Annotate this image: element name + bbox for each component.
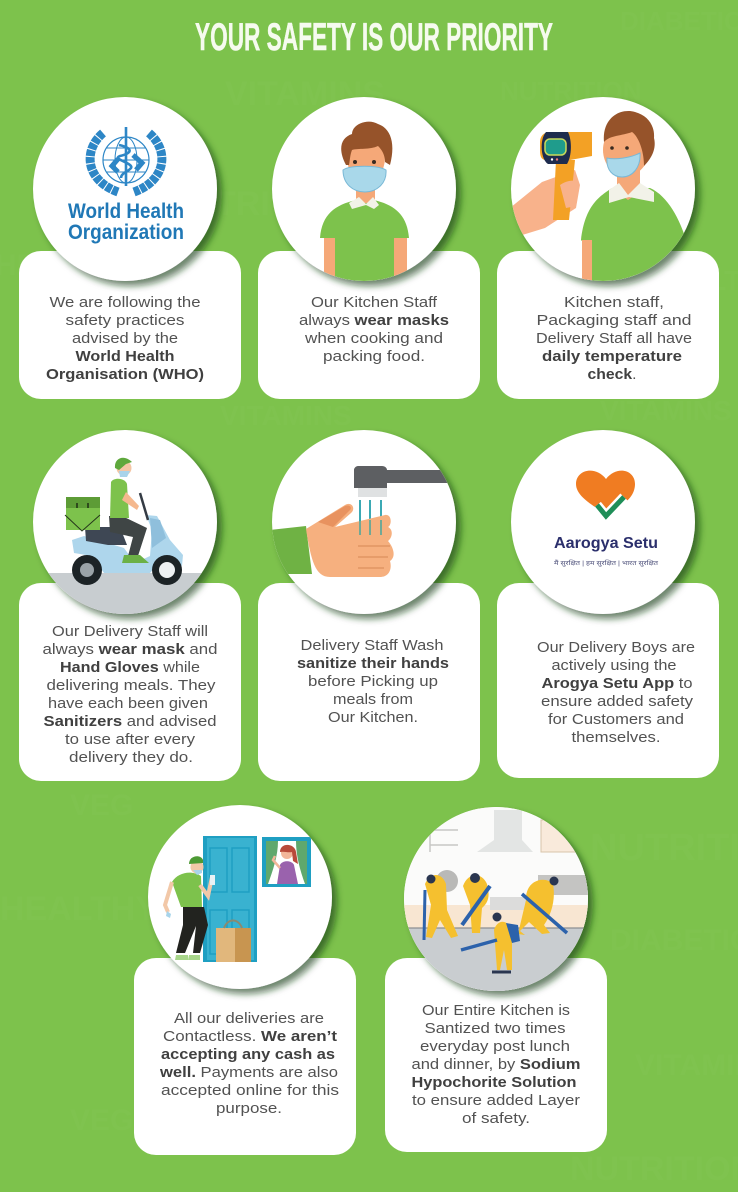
delivery man: [176, 907, 208, 953]
panel: WHO text: advised by the: [72, 330, 178, 347]
panel: masks text: always wear masks: [299, 312, 449, 329]
panel: temperature text: Kitchen staff,: [564, 294, 664, 311]
panel: WHO text: safety practices: [66, 312, 184, 329]
background word pattern: VITAMINS: [600, 395, 732, 426]
panel: sanitizing text: [385, 958, 607, 1152]
panel: hand wash text: meals from: [333, 691, 413, 708]
circle: temperature check: [505, 97, 695, 285]
background word pattern: HEALTHY: [0, 890, 158, 928]
thermometer handle: [553, 160, 575, 220]
hand: [306, 504, 394, 577]
hair: [604, 111, 655, 166]
panel: contactless text: purpose.: [216, 1100, 282, 1117]
panel: temperature text: daily temperature: [542, 348, 682, 365]
worker one: [425, 875, 458, 938]
panel: contactless text: well. Payments are also: [159, 1064, 338, 1081]
background word pattern: VEG: [70, 1104, 133, 1137]
circle: hand washing under tap: [270, 430, 456, 614]
wheels: [72, 555, 102, 585]
panel: delivery staff text: delivering meals. They: [46, 677, 216, 694]
head: [348, 146, 385, 168]
panel: delivery staff text: to use after every: [65, 731, 196, 748]
WHO wordmark: [68, 200, 184, 244]
worker two: [463, 875, 489, 933]
panel: Aarogya Setu text: actively using the: [552, 657, 676, 674]
panel: Aarogya Setu text: for Customers and: [548, 711, 684, 728]
panel: sanitizing text: everyday post lunch: [420, 1038, 570, 1055]
background word pattern: NUTRITION: [500, 76, 642, 106]
seat: [85, 527, 127, 545]
panel: delivery staff text: Hand Gloves while: [60, 659, 200, 676]
shirt: [320, 200, 409, 283]
panel: WHO text: World Health: [76, 348, 174, 365]
panel: contactless text: All our deliveries are: [174, 1010, 324, 1027]
panel: sanitizing text: Hypochorite Solution: [412, 1074, 576, 1091]
panel: delivery staff text: always wear mask and: [42, 641, 218, 658]
panel: temperature text: Delivery Staff all have: [536, 330, 692, 347]
window with customer: [262, 837, 311, 887]
panel: temperature text: Packaging staff and: [536, 312, 692, 329]
panel: contactless text: accepted online for this: [161, 1082, 339, 1099]
panel: sanitizing text: and dinner, by Sodium: [412, 1056, 580, 1073]
sleeve: [270, 526, 312, 574]
tagline: मैं सुरक्षित | हम सुरक्षित | भारत सुरक्षित: [554, 559, 659, 567]
background word pattern: VITAMINS: [220, 400, 352, 431]
water streams: [359, 500, 382, 522]
panel: Aarogya Setu text: [497, 583, 719, 778]
shirt: [581, 188, 686, 285]
panel: masks text: when cooking and: [304, 330, 443, 347]
panel: contactless text: [134, 958, 356, 1155]
kitchen background: [404, 807, 588, 991]
panel: sanitizing text: to ensure added Layer: [412, 1092, 580, 1109]
mask: [343, 166, 386, 192]
road: [48, 573, 202, 614]
panel: delivery staff text: have each been given: [48, 695, 208, 712]
door: [203, 836, 257, 962]
scooter body: [72, 515, 183, 573]
panel: hand wash text: sanitize their hands: [297, 655, 449, 672]
arms: [324, 238, 407, 276]
panel: Aarogya Setu text: ensure added safety: [541, 693, 694, 710]
WHO wordmark: Organization: [68, 221, 184, 244]
icon: WHO emblem: [90, 127, 162, 192]
background word pattern: VITAMINS: [225, 75, 385, 113]
panel: Aarogya Setu text: themselves.: [572, 729, 660, 746]
handlebar: [140, 493, 148, 520]
panel: delivery staff text: [19, 583, 241, 781]
face: [603, 132, 645, 170]
neck: [617, 170, 640, 200]
panel: masks text: [258, 251, 480, 399]
shoe: [122, 555, 149, 563]
background word pattern: VEG: [70, 789, 133, 822]
panel: delivery staff text: Our Delivery Staff will: [52, 623, 208, 640]
panel: delivery staff text: delivery they do.: [69, 749, 193, 766]
panel: Aarogya Setu text: Arogya Setu App to: [542, 675, 692, 692]
panel: sanitizing text: Santized two times: [424, 1020, 566, 1037]
worker four: [494, 922, 512, 970]
helmet and face: [116, 462, 132, 474]
circle: contactless delivery: [148, 805, 332, 989]
panel: masks text: packing food.: [323, 348, 425, 365]
panel: sanitizing text: Our Entire Kitchen is: [422, 1002, 570, 1019]
Aarogya Setu wordmark: Aarogya Setu: [554, 535, 658, 552]
circle: Aarogya Setu logo: [511, 430, 695, 614]
legs: [109, 516, 147, 556]
background word pattern: TRITION: [215, 185, 351, 223]
panel: WHO text: We are following the: [50, 294, 200, 311]
torso: [110, 479, 129, 518]
panel: WHO text: [19, 251, 241, 399]
delivery box: [66, 508, 100, 530]
panel: Aarogya Setu text: Our Delivery Boys are: [537, 639, 695, 656]
circle: staff wearing mask: [272, 97, 456, 283]
package: [216, 928, 235, 962]
WHO wordmark: World Health: [68, 200, 184, 223]
icon: heart with check: [576, 471, 635, 516]
thermometer body: [540, 132, 592, 160]
circle: kitchen sanitizing: [404, 807, 591, 998]
tap: [354, 466, 450, 488]
panel: delivery staff text: Sanitizers and advised: [44, 713, 216, 730]
panel: hand wash text: Our Kitchen.: [328, 709, 418, 726]
panel: contactless text: Contactless. We aren’t: [163, 1028, 337, 1045]
panel: WHO text: Organisation (WHO): [46, 366, 204, 383]
panel: hand wash text: before Picking up: [308, 673, 438, 690]
mask: [607, 153, 640, 177]
circle: WHO logo: [33, 97, 217, 281]
panel: sanitizing text: of safety.: [462, 1110, 530, 1127]
panel: temperature text: [497, 251, 719, 399]
circle: delivery rider on scooter: [30, 430, 220, 618]
hair: [341, 122, 392, 165]
worker three: [518, 880, 554, 935]
panel: masks text: Our Kitchen Staff: [311, 294, 438, 311]
panel: temperature text: check.: [588, 366, 636, 383]
panel: hand wash text: Delivery Staff Wash: [300, 637, 444, 654]
panel: hand wash text: [258, 583, 480, 781]
hand: [512, 170, 580, 235]
panel: contactless text: accepting any cash as: [161, 1046, 335, 1063]
neck and collar: [356, 190, 375, 203]
